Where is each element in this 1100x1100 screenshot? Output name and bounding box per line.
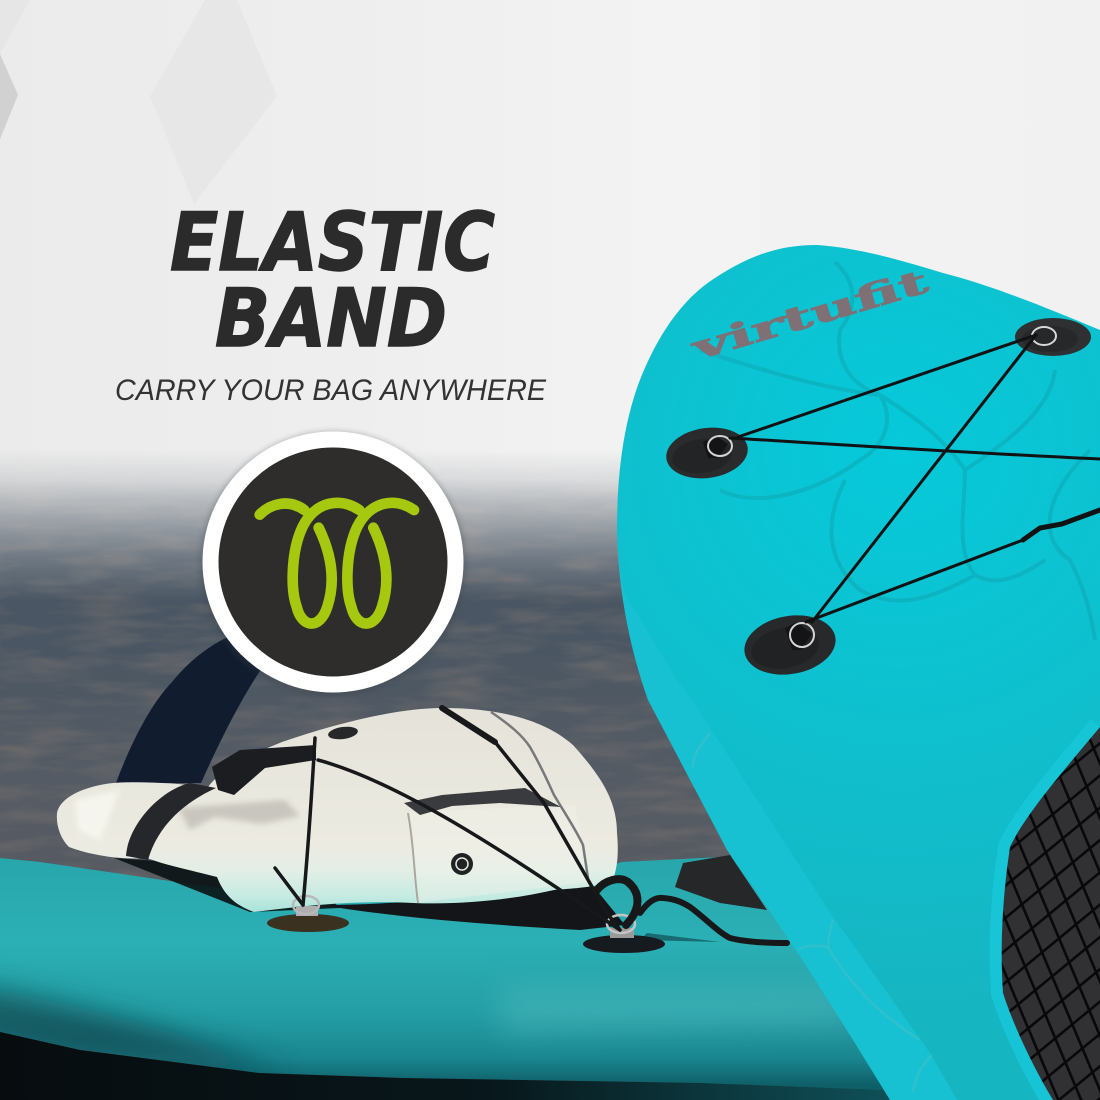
- bag mesh back panel: [321, 882, 625, 930]
- paddle blade: [116, 636, 262, 783]
- pocket seam: [408, 813, 418, 903]
- bag body: [57, 708, 618, 912]
- cords: [730, 335, 1100, 622]
- brand logotype: virtufit: [686, 261, 934, 368]
- shading folds: [178, 800, 300, 830]
- anchor plate top right: [1015, 318, 1091, 356]
- bag logo badge: [451, 853, 473, 875]
- lower paddleboard: [0, 855, 925, 1100]
- board top face: [617, 245, 1100, 1100]
- subtitle: CARRY YOUR BAG ANYWHERE: [115, 374, 547, 407]
- reflective trim: [491, 712, 588, 878]
- dry bag: [57, 708, 625, 930]
- title: BAND: [215, 272, 447, 365]
- elastic cords on the foreground board: [663, 318, 1100, 682]
- compression strap: [126, 783, 216, 860]
- rail seam marks: [693, 733, 932, 1092]
- elastic cords and straps on the bag: [275, 708, 787, 943]
- background: water: [0, 460, 879, 1090]
- top logo badge: [327, 725, 359, 741]
- traction pad: [675, 855, 767, 910]
- strap shadow: [640, 933, 720, 942]
- board hull shadow, lower left: [0, 985, 290, 1075]
- anchor plate bottom: [740, 608, 840, 682]
- icon: elastic spring badge: [200, 431, 466, 697]
- petal pattern: [700, 262, 1095, 640]
- title: [170, 196, 495, 365]
- zipper: [404, 788, 561, 815]
- buckle strap: [212, 745, 316, 795]
- anchor plate left: [663, 423, 751, 483]
- black traction pad: [1002, 727, 1100, 1100]
- background: light studio backdrop: [0, 0, 1100, 640]
- title: ELASTIC: [170, 196, 495, 289]
- pad rim highlight: [1002, 727, 1100, 1100]
- D-ring anchors on lower board: [267, 896, 665, 953]
- hexagon pattern: [0, 0, 277, 470]
- shadow under bag: [114, 858, 340, 912]
- foreground teal paddleboard: [617, 245, 1100, 1100]
- dark water under board: [0, 1032, 892, 1100]
- board side rail: [617, 530, 1100, 1100]
- wet highlight: [500, 985, 860, 1035]
